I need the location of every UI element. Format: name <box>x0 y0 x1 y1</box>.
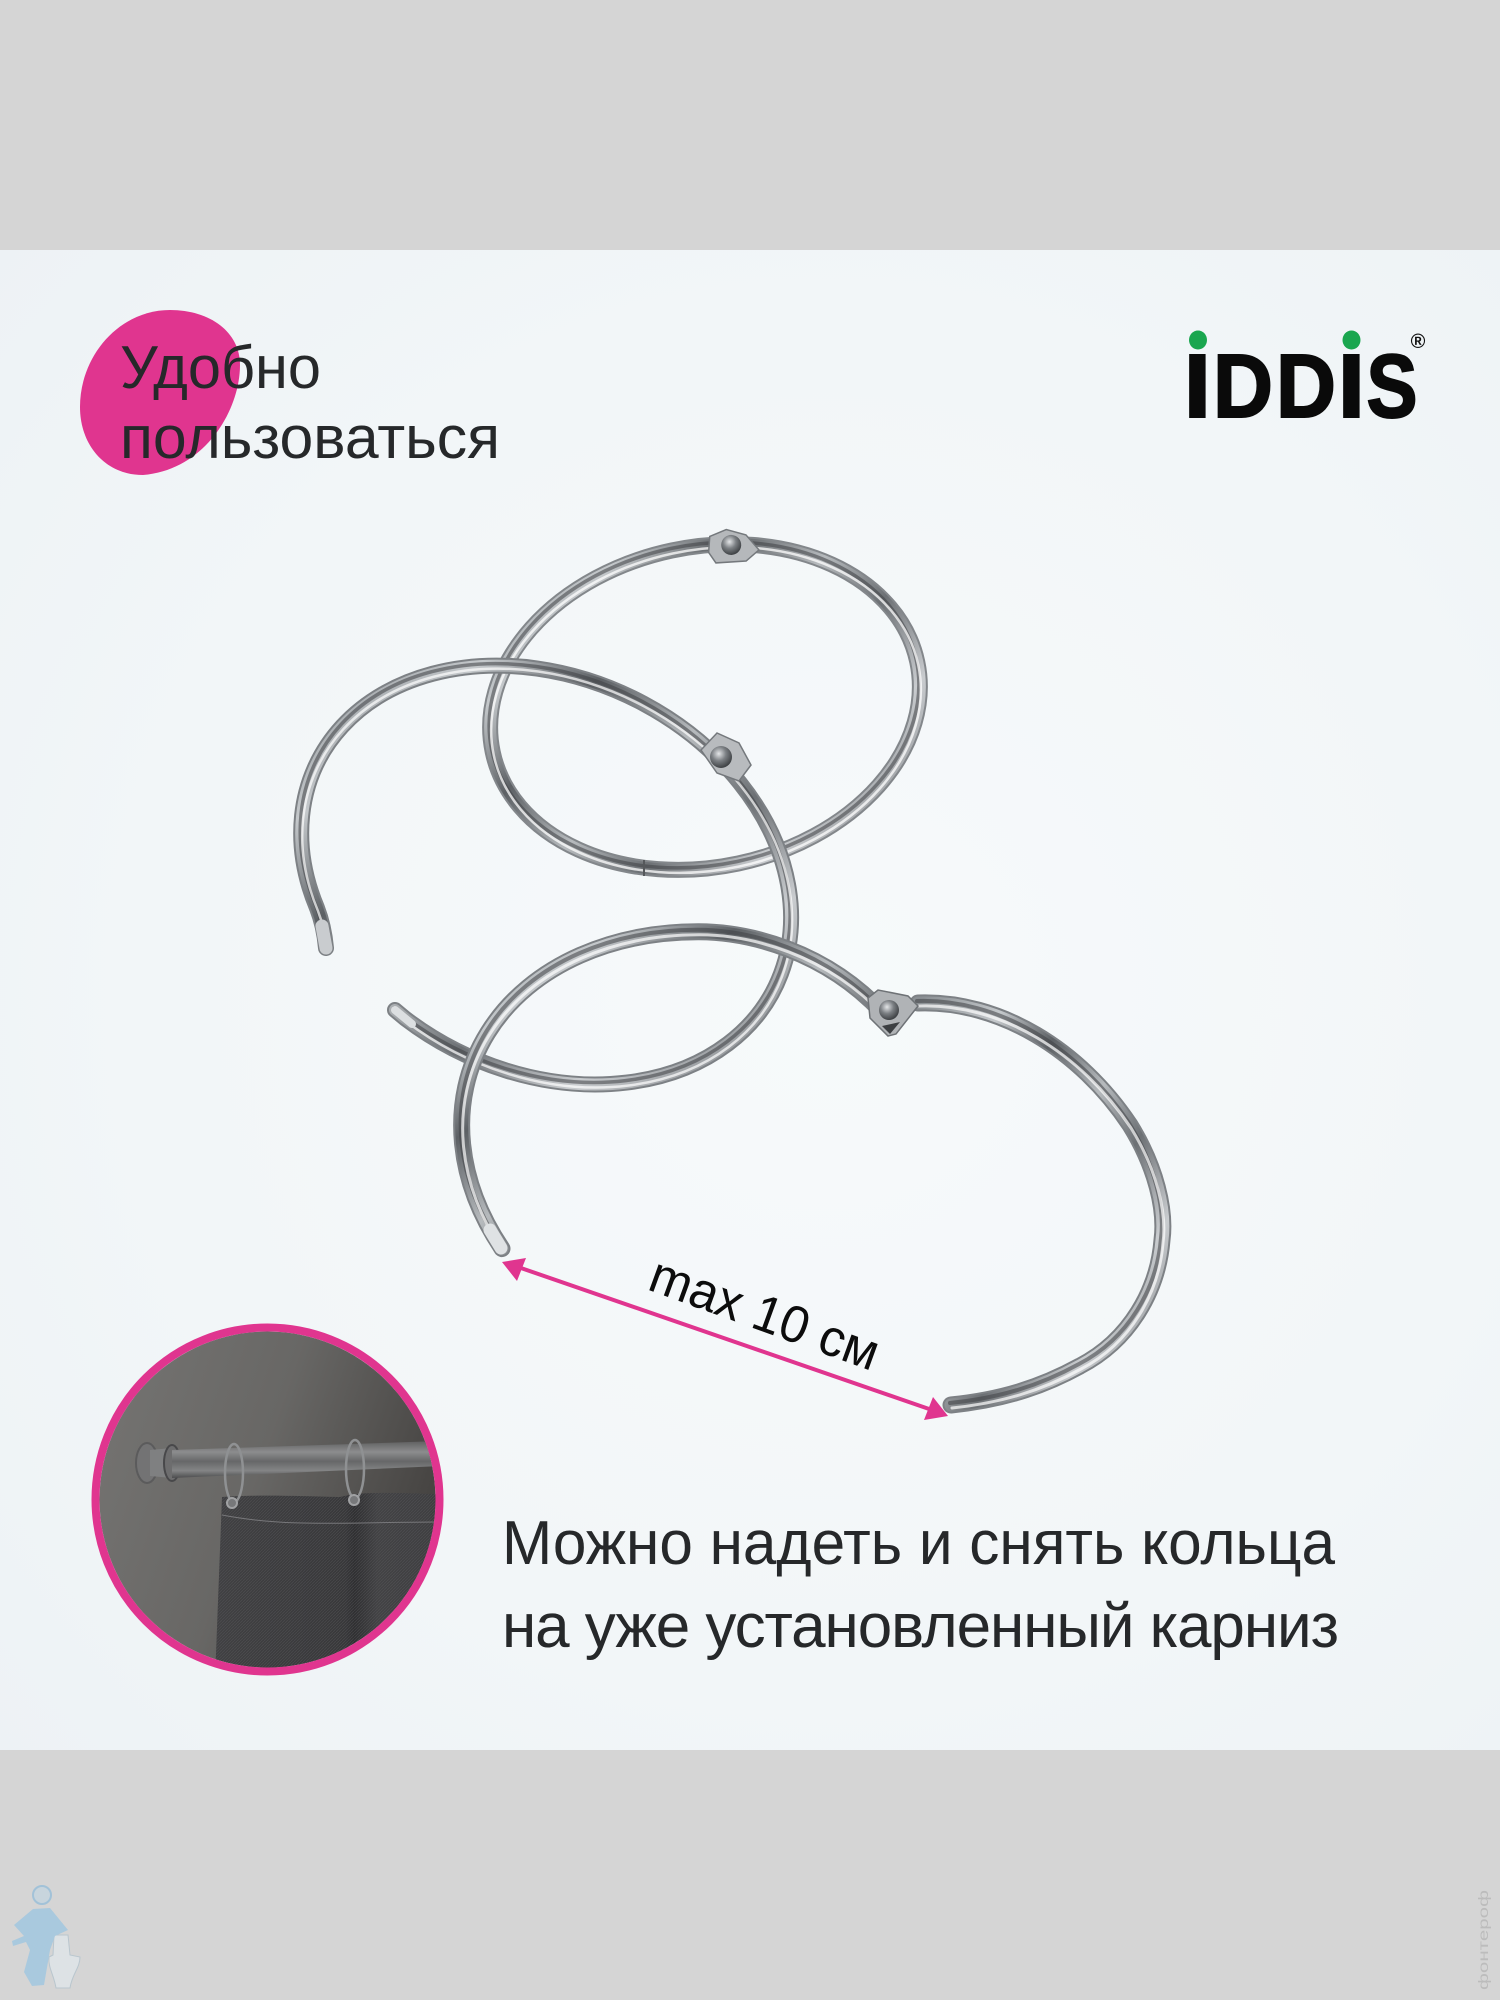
logo: iddis <box>1184 330 1426 437</box>
grommets <box>227 1495 359 1508</box>
ring 3: open front ring <box>461 930 1164 1408</box>
plumber head <box>33 1886 51 1904</box>
dimension arrow <box>502 1258 948 1420</box>
ring 3 hinge <box>868 990 918 1036</box>
plumber figure <box>12 1908 68 1986</box>
ring 2: open middle ring <box>300 664 792 1087</box>
ring 2 tail tip <box>395 1010 412 1024</box>
inset photo: curtain rod with rings <box>92 1323 444 1680</box>
ring hooks <box>225 1440 364 1502</box>
caption: на уже установленный карниз <box>502 1592 1339 1661</box>
ring 3 rough tip <box>490 1230 501 1248</box>
heading text: Удобно <box>120 334 321 401</box>
logo green dots <box>1189 330 1360 350</box>
ring 2 rough tip <box>322 926 326 948</box>
watermark: plumber with toilet <box>12 1886 80 1988</box>
dimension label: max 10 см <box>642 1246 887 1382</box>
logo registered mark: ® <box>1411 331 1426 353</box>
ring 1 seam <box>643 860 645 876</box>
photo panel background <box>0 250 1500 1750</box>
ring 2 hinge <box>701 733 751 781</box>
curtain <box>215 1493 440 1680</box>
heading text: пользоваться <box>120 404 500 471</box>
logo wordmark: D <box>1213 337 1273 437</box>
wall <box>92 1323 444 1676</box>
watermark: vertical site name: фонтероф <box>1475 1890 1491 1990</box>
pink blob <box>80 310 240 475</box>
ring 1 hinge <box>708 528 760 566</box>
logo wordmark: S <box>1366 337 1418 437</box>
logo wordmark: I <box>1338 337 1365 437</box>
heading block <box>80 310 500 475</box>
caption: Можно надеть и снять кольца <box>502 1509 1335 1578</box>
ring 1: closed ring at the back <box>458 503 952 912</box>
logo wordmark: D <box>1276 337 1336 437</box>
toilet <box>49 1935 80 1988</box>
curtain rod <box>172 1441 440 1478</box>
rod flange <box>136 1443 180 1483</box>
inset border <box>96 1328 440 1672</box>
logo wordmark: I <box>1184 337 1211 437</box>
curtain seam <box>222 1515 440 1523</box>
